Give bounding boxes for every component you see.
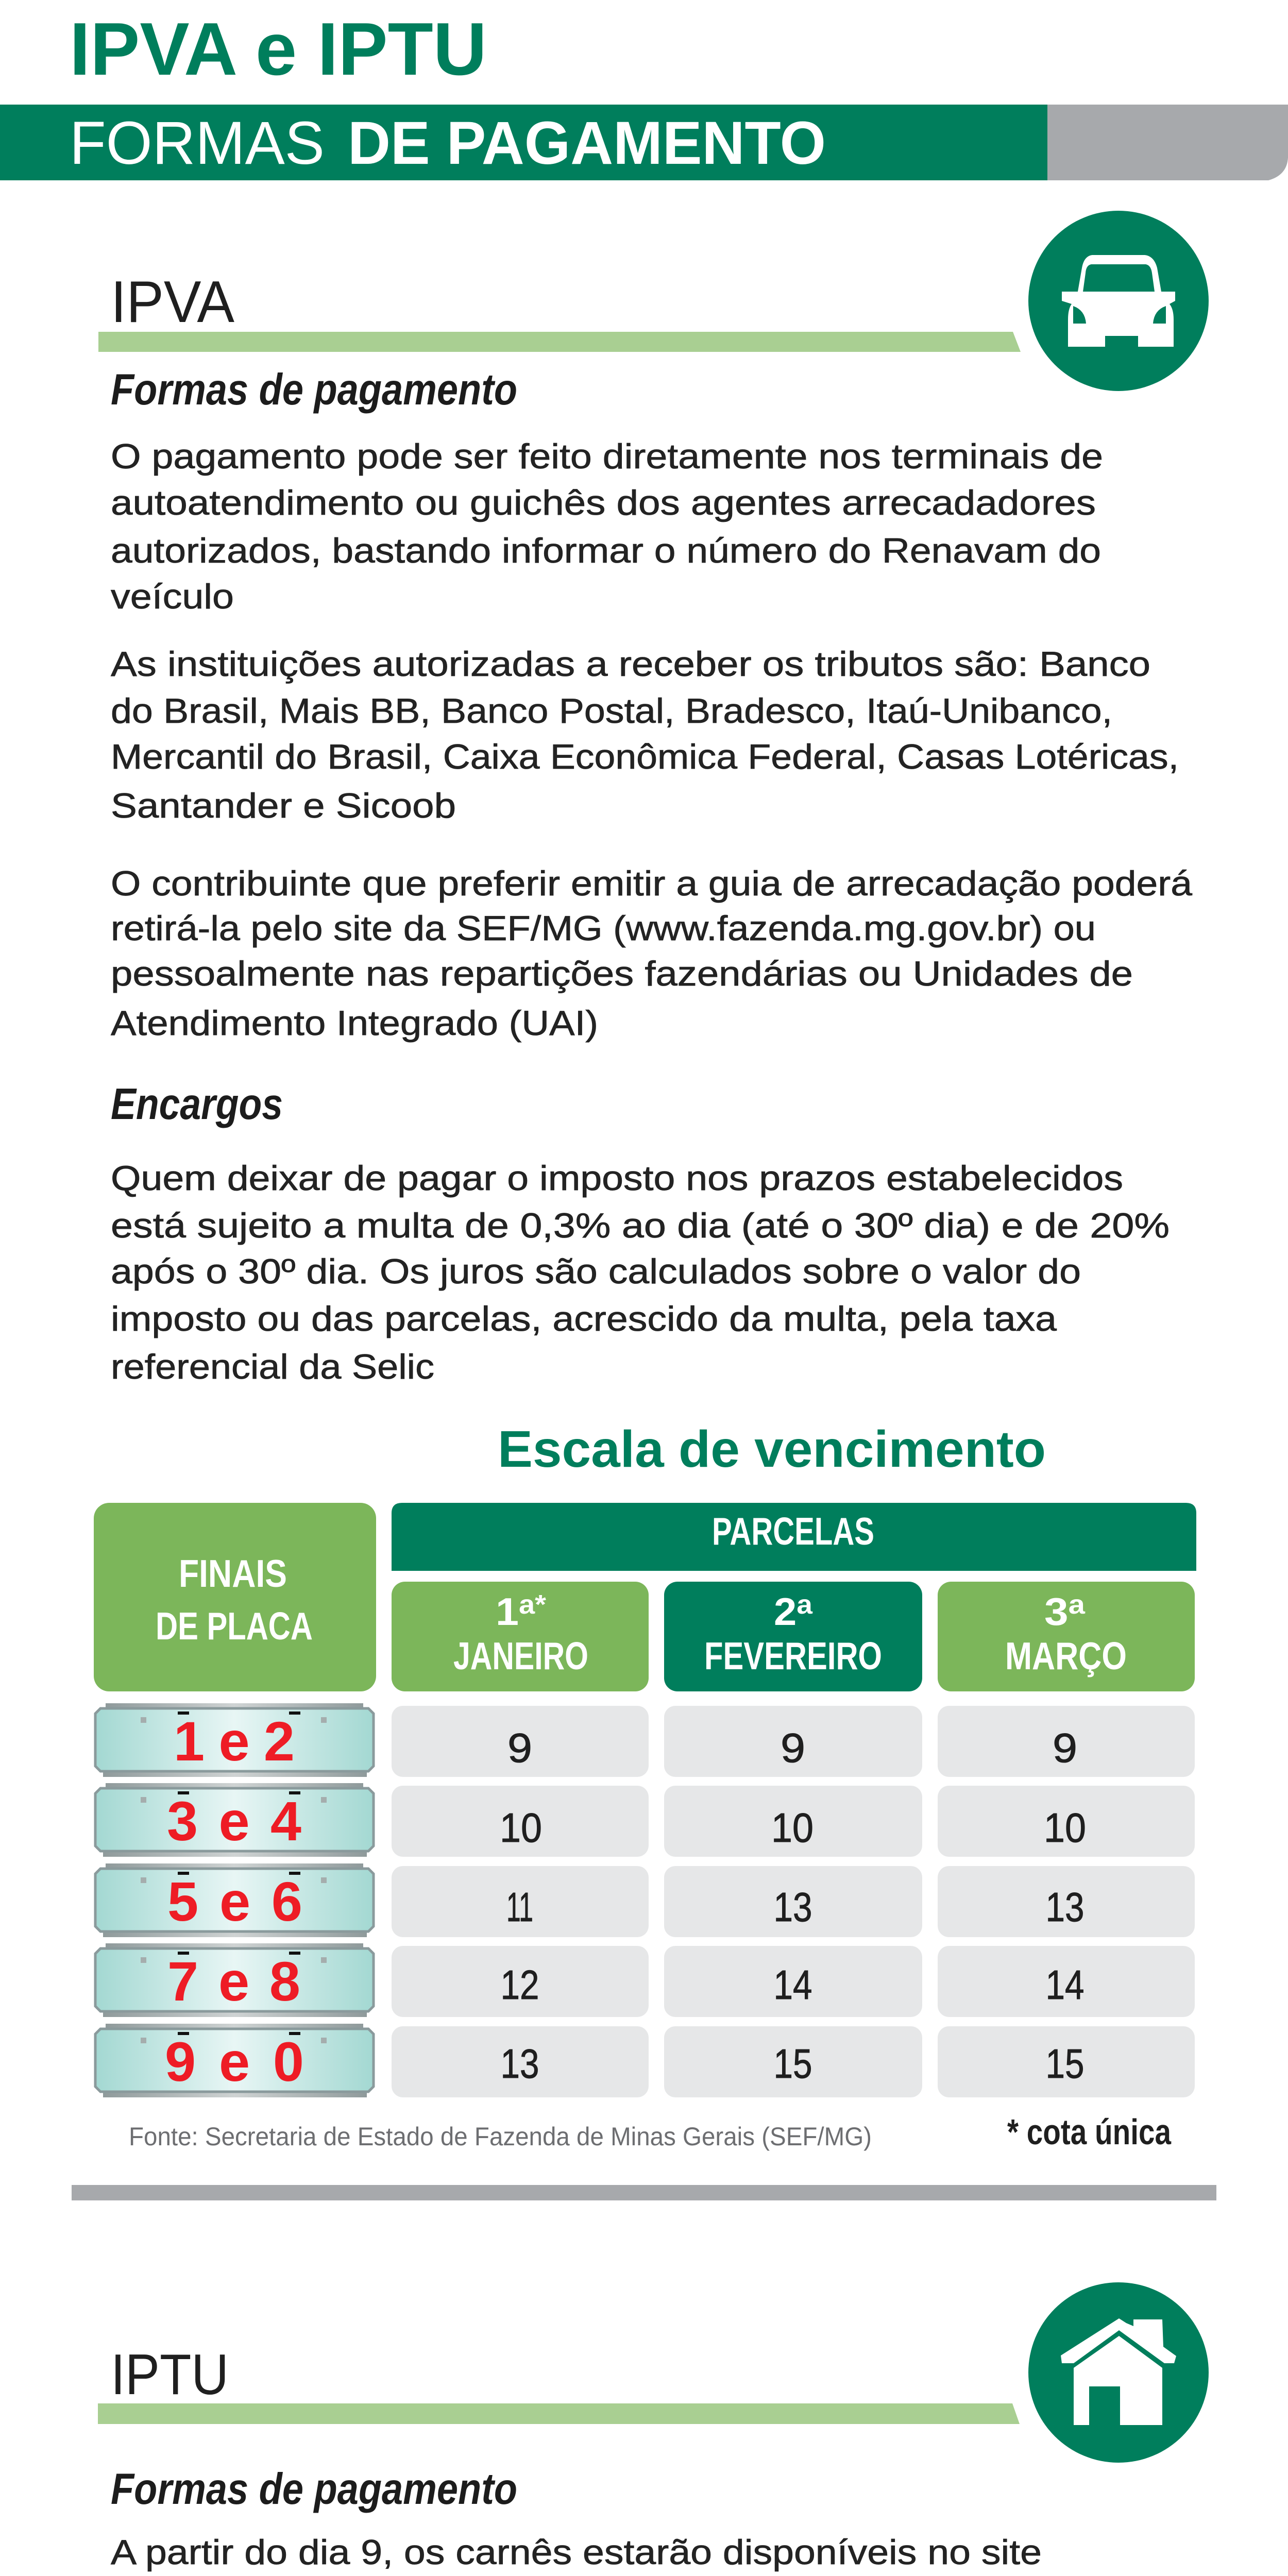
header: 1a janeiro: JANEIRO	[453, 1634, 588, 1677]
text block: instituições: As instituições autorizadas a receber os tributos são: Banco	[111, 645, 1150, 684]
text block: encargos IPVA: referencial da Selic	[111, 1347, 434, 1386]
row: finais 5 e 6: 11	[506, 1884, 533, 1930]
text block: guia de arrecadação: O contribuinte que preferir emitir a guia de arrecadação poderá	[111, 864, 1192, 903]
row: finais 3 e 4: 10	[771, 1805, 814, 1851]
text block: terminais: O pagamento pode ser feito diretamente nos terminais de	[111, 437, 1103, 476]
header: 1a janeiro: 1	[496, 1590, 517, 1633]
header: finais de placa: DE PLACA	[156, 1604, 313, 1648]
text block: guia de arrecadação: retirá-la pelo site da SEF/MG (www.fazenda.mg.gov.br) ou	[111, 909, 1096, 948]
license plate: 1 e 2	[95, 1703, 374, 1777]
license plate: 9 e 0	[95, 2024, 374, 2097]
license plate: 9 e 0: 9e0	[165, 2030, 304, 2093]
heading: IPTU: IPTU	[111, 2343, 229, 2406]
header: 3a março: a	[1069, 1590, 1086, 1620]
license plate: 5 e 6	[95, 1863, 374, 1937]
header: 1a janeiro: a*	[519, 1590, 547, 1620]
header band: formas de pagamento	[0, 105, 1288, 180]
title: IPVA e IPTU	[70, 7, 487, 91]
header: 2a fevereiro: 2	[774, 1590, 795, 1633]
header: 2a fevereiro	[664, 1582, 922, 1691]
row: finais 9 e 0: 15	[774, 2041, 812, 2087]
row: finais 9 e 0: 15	[1046, 2041, 1084, 2087]
text block: instituições	[111, 645, 1179, 825]
text block: guia de arrecadação: pessoalmente nas repartições fazendárias ou Unidades de	[111, 954, 1133, 993]
header: finais de placa: FINAIS	[179, 1552, 287, 1595]
row: finais 3 e 4	[95, 1783, 1195, 1857]
row: finais 7 e 8: 14	[774, 1962, 812, 2008]
row: finais 9 e 0	[95, 2024, 1195, 2097]
text block: encargos IPVA: Quem deixar de pagar o imposto nos prazos estabelecidos	[111, 1159, 1123, 1198]
text block: instituições: Santander e Sicoob	[111, 786, 456, 825]
header: 2a fevereiro: a	[796, 1590, 813, 1620]
row: finais 5 e 6	[95, 1863, 1195, 1937]
header band: formas de pagamento: DE PAGAMENTO	[348, 109, 826, 177]
subheading: formas de pagamento: Formas de pagamento	[111, 2465, 517, 2514]
header: 2a fevereiro: FEVEREIRO	[704, 1634, 882, 1677]
row: finais 5 e 6: 13	[1046, 1884, 1084, 1930]
table: escala de vencimento	[94, 1503, 1196, 2097]
text block: guia de arrecadação	[111, 864, 1192, 1043]
header: parcelas	[392, 1503, 1196, 1571]
text block: carnês no site: A partir do dia 9, os carnês estarão disponíveis no site	[111, 2533, 1042, 2572]
section: IPVA	[98, 211, 1209, 1386]
row: finais 3 e 4: 10	[1044, 1805, 1086, 1851]
text block: terminais	[111, 437, 1103, 616]
header: 3a março	[938, 1582, 1195, 1691]
license plate: 5 e 6: 5e6	[167, 1870, 302, 1933]
license plate: 3 e 4	[95, 1783, 374, 1857]
subheading: formas de pagamento: Formas de pagamento	[111, 365, 517, 414]
header: parcelas: PARCELAS	[712, 1510, 874, 1553]
text block: instituições: do Brasil, Mais BB, Banco Postal, Bradesco, Itaú-Unibanco,	[111, 691, 1112, 731]
source note: Fonte: Secretaria de Estado de Fazenda de Minas Gerais (SEF/MG)	[129, 2122, 872, 2151]
heading underline bar	[98, 332, 1021, 352]
row: finais 1 e 2: 9	[781, 1725, 805, 1771]
header: 1a janeiro	[392, 1582, 649, 1691]
heading: IPVA: IPVA	[111, 269, 234, 335]
license plate: 7 e 8: 7e8	[167, 1950, 300, 2012]
row: finais 1 e 2: 9	[1053, 1725, 1077, 1771]
table title: escala de vencimento: Escala de vencimento	[498, 1420, 1046, 1478]
heading underline bar	[98, 2403, 1020, 2424]
text block: encargos IPVA: está sujeito a multa de 0,3% ao dia (até o 30º dia) e de 20%	[111, 1206, 1170, 1245]
icon: house	[1028, 2282, 1209, 2463]
header band: formas de pagamento: FORMAS	[70, 109, 325, 177]
row: finais 1 e 2	[95, 1703, 1195, 1777]
header: 3a março: MARÇO	[1005, 1634, 1127, 1677]
text block: encargos IPVA: imposto ou das parcelas, acrescido da multa, pela taxa	[111, 1299, 1057, 1338]
section: IPTU	[98, 2282, 1209, 2576]
text block: encargos IPVA	[111, 1159, 1170, 1386]
text block: instituições: Mercantil do Brasil, Caixa Econômica Federal, Casas Lotéricas,	[111, 737, 1179, 776]
footnote: cota única: * cota única	[1007, 2112, 1172, 2152]
row: finais 7 e 8	[95, 1943, 1195, 2017]
text block: terminais: veículo	[111, 577, 234, 616]
text block: terminais: autorizados, bastando informar o número do Renavam do	[111, 531, 1101, 570]
row: finais 1 e 2: 9	[507, 1725, 532, 1771]
row: finais 7 e 8: 12	[501, 1962, 539, 2008]
subheading: encargos: Encargos	[111, 1080, 283, 1129]
license plate: 3 e 4: 3e4	[167, 1790, 301, 1852]
row: finais 9 e 0: 13	[501, 2041, 539, 2087]
license plate: 7 e 8	[95, 1943, 374, 2017]
text block: guia de arrecadação: Atendimento Integrado (UAI)	[111, 1004, 598, 1043]
header: 3a março: 3	[1044, 1590, 1066, 1633]
text block: encargos IPVA: após o 30º dia. Os juros são calculados sobre o valor do	[111, 1252, 1081, 1291]
row: finais 5 e 6: 13	[774, 1884, 812, 1930]
header: finais de placa	[94, 1503, 376, 1691]
row: finais 7 e 8: 14	[1046, 1962, 1084, 2008]
row: finais 3 e 4: 10	[500, 1805, 542, 1851]
text block: terminais: autoatendimento ou guichês dos agentes arrecadadores	[111, 483, 1096, 522]
license plate: 1 e 2: 1e2	[174, 1710, 295, 1772]
icon: car	[1028, 211, 1209, 391]
